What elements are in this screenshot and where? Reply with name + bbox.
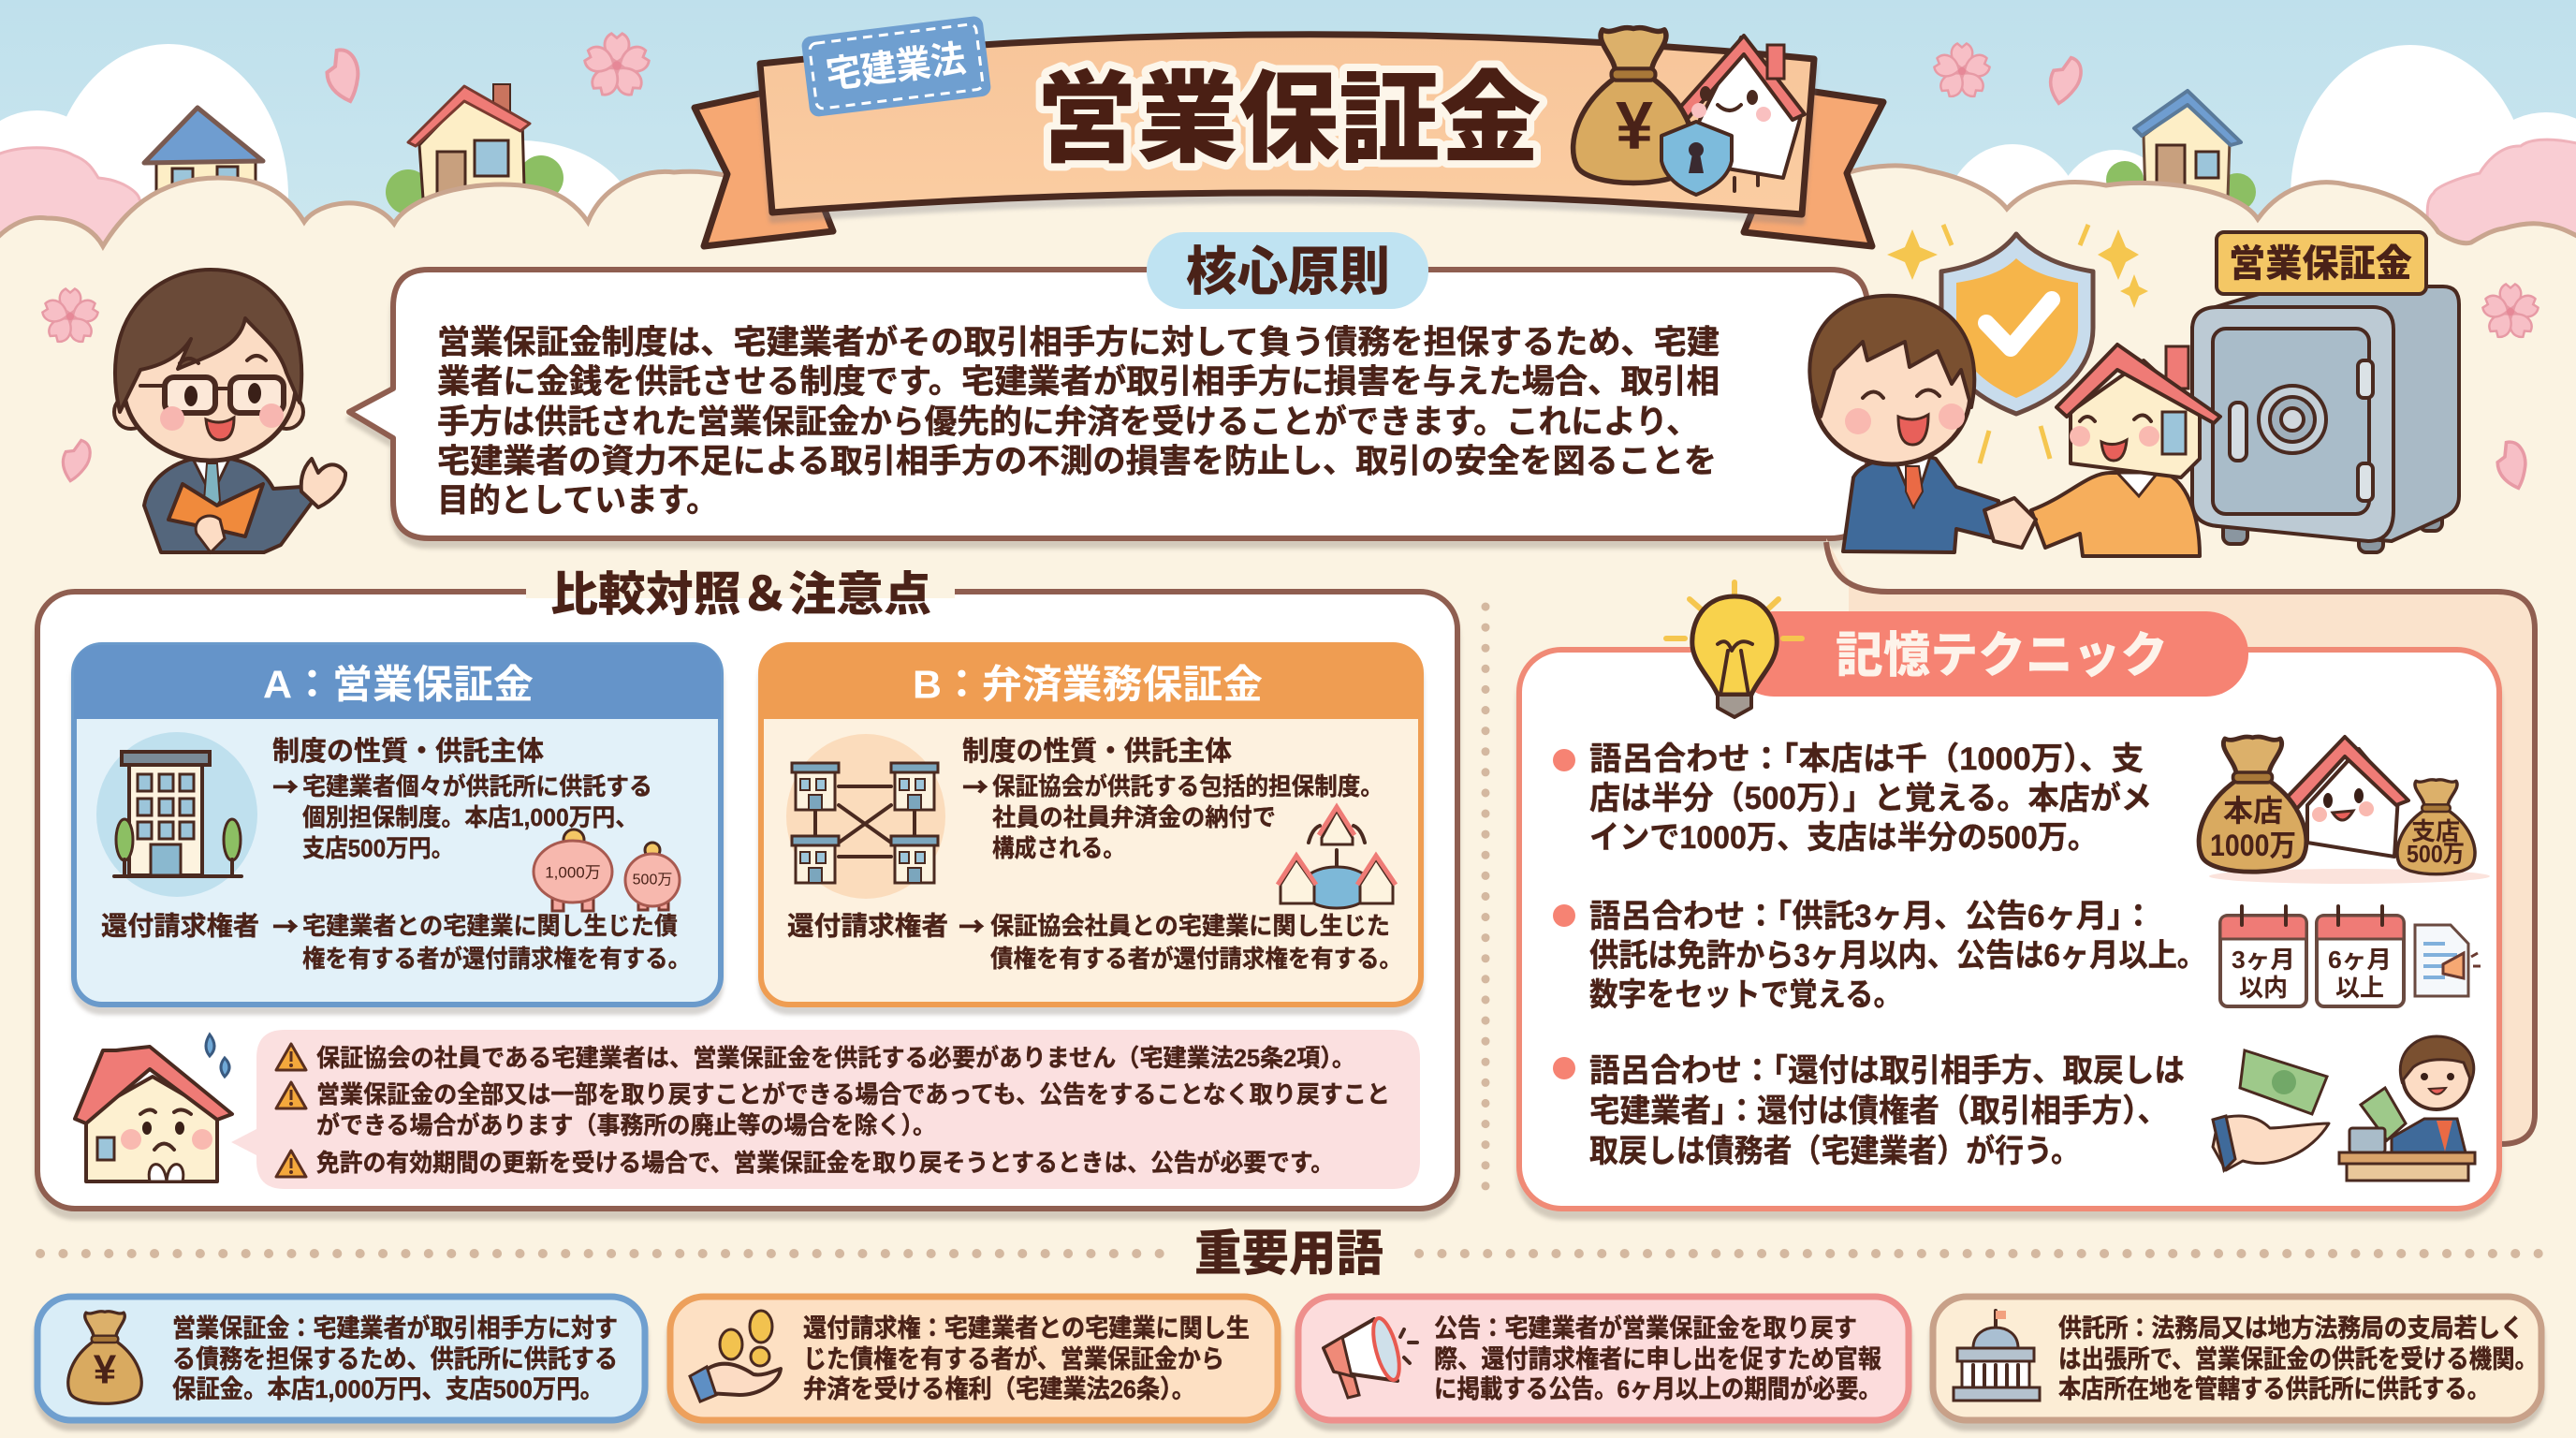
- icon: government building: [1954, 1311, 2040, 1401]
- warning text: [316, 1044, 1390, 1177]
- card B: 弁済業務保証金: [761, 645, 1421, 1005]
- sakura decorations: [40, 34, 2540, 492]
- panel: right peach backdrop: [1826, 538, 2535, 1144]
- term text: 還付請求権：宅建業者との宅建業に関し生: [803, 1314, 1250, 1343]
- card B heading: B：弁済業務保証金: [913, 663, 1263, 706]
- icon: money bag: ¥: [94, 1346, 117, 1393]
- card A: 営業保証金: [74, 645, 721, 1005]
- businessman: [1809, 296, 1998, 552]
- pink trees: [0, 139, 2576, 271]
- heading pill: 核心原則: 核心原則: [1186, 242, 1390, 301]
- icon: money bags with house: 支店: [2411, 817, 2460, 845]
- heading pill: 記憶テクニック: 記憶テクニック: [1836, 629, 2168, 683]
- core principle text: 営業保証金制度は、宅建業者がその取引相手方に対して負う債務を担保するため、宅建: [437, 324, 1720, 361]
- panel: core principle speech bubble: [349, 232, 1867, 538]
- icon: money bags with house: 本店: [2223, 794, 2283, 828]
- icon: calendars and notice: 以上: [2335, 974, 2384, 1002]
- term text: 際、還付請求権者に申し出を促すため官報: [1434, 1345, 1881, 1373]
- icon: money bags with house: [2199, 737, 2490, 884]
- card A heading: A：営業保証金: [263, 663, 534, 706]
- memory item 2: 供託は免許から3ヶ月以内、公告は6ヶ月以上。: [1589, 938, 2206, 974]
- bullet markers: [1553, 749, 1575, 1079]
- memory item 2: [1589, 899, 2206, 1013]
- term text: じた債権を有する者が、営業保証金から: [803, 1344, 1224, 1373]
- core principle text: 業者に金銭を供託させる制度です。宅建業者が取引相手方に損害を与えた場合、取引相: [437, 363, 1720, 401]
- house mascot with orange body: [1984, 345, 2220, 556]
- tag: 宅建業法: [800, 15, 992, 118]
- warning text: ができる場合があります（事務所の廃止等の場合を除く）。: [316, 1111, 936, 1139]
- panel: comparison: [37, 568, 2541, 1420]
- core principle text: [437, 324, 1720, 519]
- icon: money bag with house mascot and shield: [1573, 28, 1805, 195]
- memory item 1: 店は半分（500万）」と覚える。本店がメ: [1589, 780, 2152, 816]
- house: blue roof left: [144, 108, 263, 215]
- card B text: →: [962, 768, 988, 805]
- term text: は出張所で、営業保証金の供託を受ける機関。: [2058, 1345, 2538, 1373]
- term text: 公告：宅建業者が営業保証金を取り戻す: [1434, 1313, 1857, 1343]
- term text: 本店所在地を管轄する供託所に供託する。: [2058, 1375, 2490, 1403]
- term text: [803, 1314, 1250, 1403]
- house: blue roof right: [2106, 91, 2256, 211]
- memory item 2: 数字をセットで覚える。: [1589, 977, 1902, 1013]
- icon: calendars and notice: 6ヶ月: [2328, 946, 2392, 974]
- memory item 1: 語呂合わせ：「本店は千（1000万）、支: [1589, 741, 2144, 777]
- icon: money bags with house: 500万: [2407, 840, 2465, 868]
- term card: 公告: [1298, 1297, 1909, 1420]
- heading pill: 核心原則: [1147, 232, 1428, 309]
- heading pill: 記憶テクニック: [1732, 611, 2248, 697]
- memory item 1: インで1000万、支店は半分の500万。: [1589, 820, 2098, 856]
- heading: 比較対照＆注意点: 比較対照＆注意点: [550, 568, 931, 621]
- ribbon left tail: [695, 90, 833, 246]
- card B text: →: [959, 907, 985, 945]
- term card: 営業保証金: [37, 1297, 645, 1420]
- illustration: handshake, shield and safe: [1809, 225, 2459, 556]
- card B text: 制度の性質・供託主体: [962, 736, 1232, 767]
- card B text: 社員の社員弁済金の納付で: [992, 803, 1276, 831]
- memory item 3: 宅建業者」：還付は債権者（取引相手方）、: [1589, 1093, 2168, 1129]
- core principle text: 手方は供託された営業保証金から優先的に弁済を受けることができます。これにより、: [437, 404, 1699, 440]
- icon: hand with coins: [690, 1311, 781, 1401]
- icon: money bag with house mascot and shield: ¥: [1616, 89, 1653, 164]
- card A text: →: [272, 907, 299, 945]
- shield: [1941, 234, 2093, 414]
- ribbon main: [760, 35, 1814, 214]
- card B text: 保証協会社員との宅建業に関し生じた: [990, 912, 1390, 940]
- card A text: 権を有する者が還付請求権を有する。: [302, 945, 691, 973]
- card B text: 保証協会が供託する包括的担保制度。: [992, 772, 1383, 800]
- memory item 3: 取戻しは債務者（宅建業者）が行う。: [1589, 1133, 2080, 1169]
- character: teacher with book: [114, 270, 345, 552]
- core principle text: 目的としています。: [437, 483, 718, 519]
- warning text: 免許の有効期間の更新を受ける場合で、営業保証金を取り戻そうとするときは、公告が必要です。: [316, 1149, 1334, 1177]
- title banner: [695, 15, 1883, 246]
- warning text: 保証協会の社員である宅建業者は、営業保証金を供託する必要がありません（宅建業法25条2項）。: [316, 1044, 1355, 1072]
- memory item 1: [1589, 741, 2152, 856]
- icon: worried house: [75, 1034, 232, 1181]
- sparkles: [1887, 225, 2148, 463]
- term text: [1434, 1313, 1881, 1403]
- panel: warnings: [231, 1030, 1420, 1189]
- icon: piggy banks: [534, 829, 680, 911]
- card A text: 支店500万円。: [302, 834, 454, 862]
- term text: [2058, 1314, 2538, 1403]
- memory item 3: [1589, 1053, 2185, 1169]
- icon: calendars and notice: [2220, 906, 2481, 1006]
- card B text: 債権を有する者が還付請求権を有する。: [990, 945, 1402, 973]
- term text: る債務を担保するため、供託所に供託する: [172, 1345, 618, 1373]
- card A text: →: [272, 768, 299, 805]
- card B text: [787, 736, 1402, 973]
- icon: piggy banks: 1,000万: [545, 863, 601, 882]
- ribbon right tail: [1744, 90, 1883, 246]
- title text: 営業保証金: [1036, 65, 1541, 175]
- warning text: 営業保証金の全部又は一部を取り戻すことができる場合であっても、公告をすることなく取り戻すこと: [316, 1080, 1390, 1108]
- icon: money, hand and clerk: [2213, 1036, 2475, 1181]
- safe: [2192, 286, 2459, 552]
- icon: connected buildings: [786, 734, 945, 899]
- card A text: 宅建業者との宅建業に関し生じた債: [302, 912, 678, 940]
- heading: 重要用語: 重要用語: [1194, 1227, 1383, 1282]
- warning icons: [276, 1044, 306, 1177]
- sign: 営業保証金: [2217, 232, 2426, 294]
- icon: piggy banks: 500万: [633, 873, 672, 888]
- term text: [172, 1313, 618, 1403]
- card A text: 宅建業者個々が供託所に供託する: [302, 772, 652, 800]
- icon: megaphone: [1324, 1315, 1417, 1398]
- card A text: 還付請求権者: [101, 912, 259, 940]
- house: red roof left: [386, 84, 564, 214]
- card A text: 個別担保制度。本店1,000万円、: [302, 803, 638, 831]
- background sky: [0, 0, 2576, 393]
- card A text: [101, 736, 691, 973]
- card B text: 還付請求権者: [787, 912, 948, 940]
- term card: 供託所: [1933, 1297, 2541, 1420]
- card A text: 制度の性質・供託主体: [272, 736, 544, 767]
- term text: 供託所：法務局又は地方法務局の支局若しく: [2058, 1314, 2524, 1343]
- sign: 営業保証金: 営業保証金: [2229, 243, 2412, 285]
- icon: calendars and notice: 3ヶ月: [2232, 946, 2295, 974]
- core principle text: 宅建業者の資力不足による取引相手方の不測の損害を防止し、取引の安全を図ることを: [437, 444, 1717, 479]
- term text: 保証金。本店1,000万円、支店500万円。: [172, 1375, 604, 1403]
- icon: money bags with house: 1000万: [2210, 829, 2296, 862]
- icon: money bag: [68, 1312, 141, 1403]
- term text: 弁済を受ける権利（宅建業法26条）。: [803, 1375, 1195, 1403]
- card B text: 構成される。: [992, 834, 1125, 862]
- memory item 3: 語呂合わせ：「還付は取引相手方、取戻しは: [1589, 1053, 2185, 1089]
- icon: light bulb: [1666, 582, 1802, 717]
- term text: 営業保証金：宅建業者が取引相手方に対す: [172, 1313, 618, 1343]
- memory item 2: 語呂合わせ：「供託3ヶ月、公告6ヶ月」：: [1589, 899, 2154, 934]
- icon: houses around shared pool: [1278, 807, 1396, 908]
- icon: office building: [96, 732, 257, 897]
- term card: 還付請求権: [670, 1297, 1278, 1420]
- clouds: [0, 44, 2576, 349]
- icon: calendars and notice: 以内: [2239, 974, 2288, 1002]
- tag: 宅建業法: 宅建業法: [824, 38, 968, 96]
- term text: に掲載する公告。6ヶ月以上の期間が必要。: [1434, 1374, 1881, 1403]
- panel: memory techniques: [1519, 582, 2499, 1209]
